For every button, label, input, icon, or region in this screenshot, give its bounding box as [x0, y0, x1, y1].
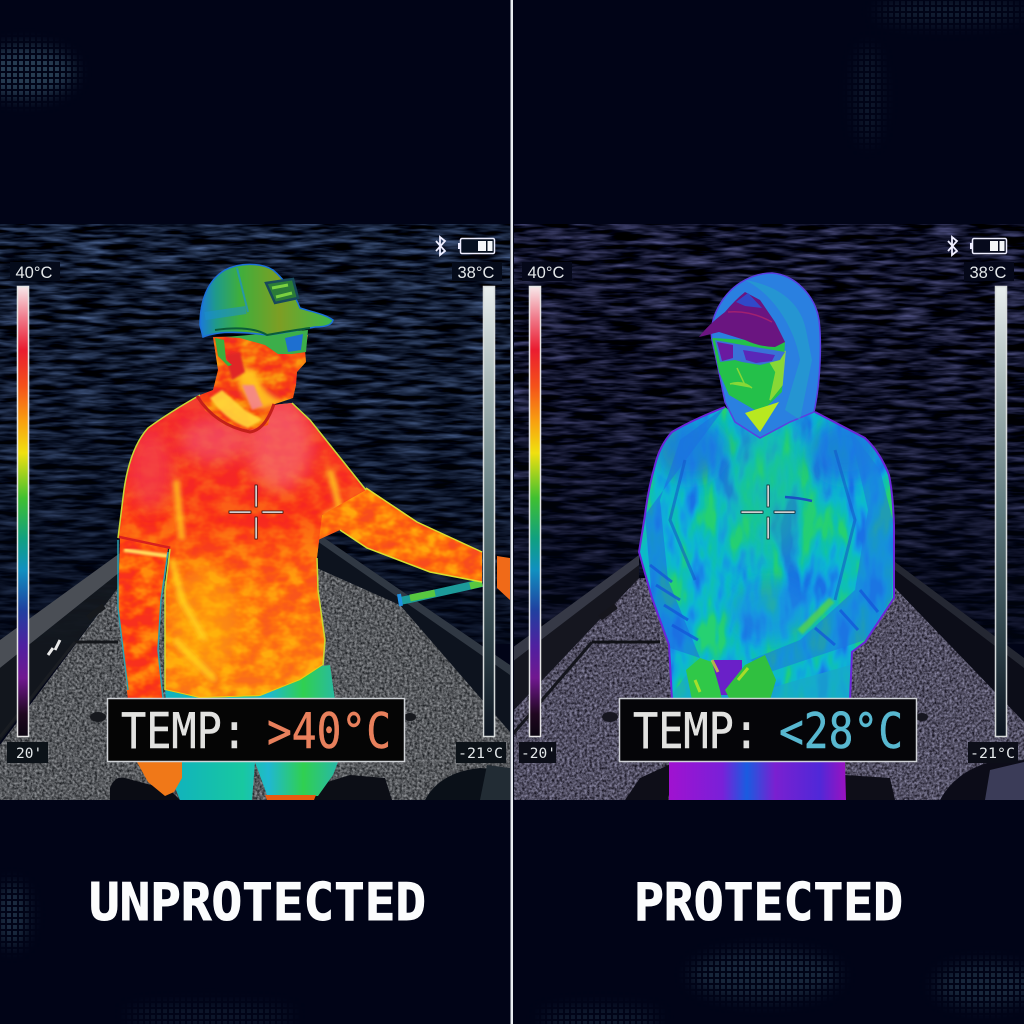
person: shorts [165, 665, 338, 800]
heading: protected: PROTECTED [634, 873, 903, 933]
min label -21°C [456, 742, 506, 763]
person: hand [137, 762, 182, 796]
icon: battery [458, 238, 494, 254]
temperature readout [108, 698, 404, 762]
person: baseball cap [200, 264, 333, 337]
max label 38°C: 38°C [458, 264, 494, 282]
temperature readout [620, 698, 916, 762]
panel: unprotected thermal image [0, 224, 510, 800]
shorts red hem [265, 795, 316, 800]
person: clasped hands [686, 655, 776, 700]
temperature readout: <28°C [779, 703, 903, 760]
colour scale bar [18, 286, 28, 736]
icon: battery [970, 238, 1006, 254]
person: hot shirt [118, 395, 366, 698]
water [514, 224, 1024, 644]
panel: protected thermal image [512, 224, 1024, 800]
person: hot right arm [319, 488, 482, 582]
max label 40°C [10, 262, 60, 282]
person: far hand [497, 556, 510, 600]
icon: bluetooth [948, 237, 957, 255]
person: hood [711, 273, 820, 438]
hoodie outline [639, 407, 894, 700]
heading: unprotected: UNPROTECTED [89, 873, 426, 933]
water [0, 224, 510, 644]
shirt outline [118, 395, 366, 690]
grey scale bar [484, 286, 494, 736]
fishing rod [399, 583, 482, 606]
person: cool hoodie body [640, 407, 893, 698]
boat deck [0, 530, 510, 800]
max label 38°C: 38°C [970, 264, 1006, 282]
temperature readout: TEMP: [633, 703, 759, 760]
min label 20: 20' [16, 746, 42, 762]
centre divider [510, 0, 513, 1024]
grey scale bar [996, 286, 1006, 736]
face highlights [730, 352, 785, 400]
min label 20 [7, 742, 48, 763]
person: hot left arm [118, 538, 168, 698]
person: pants [669, 762, 846, 800]
max label 40°C: 40°C [528, 264, 564, 282]
hood inner shading [745, 280, 812, 420]
person: ear and sunglasses [215, 330, 308, 366]
min label -20: -20' [521, 746, 556, 762]
shirt collar [197, 396, 274, 432]
min label -21°C [968, 742, 1018, 763]
temperature readout: TEMP: [121, 703, 247, 760]
max label 40°C: 40°C [16, 264, 52, 282]
icon: bluetooth [436, 237, 445, 255]
colour scale bar [530, 286, 540, 736]
person: sunglasses [715, 340, 785, 365]
max label 38°C [452, 262, 502, 282]
person: purple cap [699, 292, 785, 347]
person: neck [745, 402, 779, 432]
person: face [712, 338, 785, 413]
max label 40°C [522, 262, 572, 282]
max label 38°C [964, 262, 1014, 282]
boat deck [512, 555, 1024, 800]
right arm outline [340, 488, 482, 582]
temperature readout: >40°C [267, 703, 391, 760]
left arm outline [118, 540, 168, 698]
person: neck and face [196, 335, 308, 434]
crosshair [741, 485, 795, 539]
min label -21°C: -21°C [458, 746, 503, 762]
crosshair [229, 485, 283, 539]
min label -21°C: -21°C [970, 746, 1015, 762]
